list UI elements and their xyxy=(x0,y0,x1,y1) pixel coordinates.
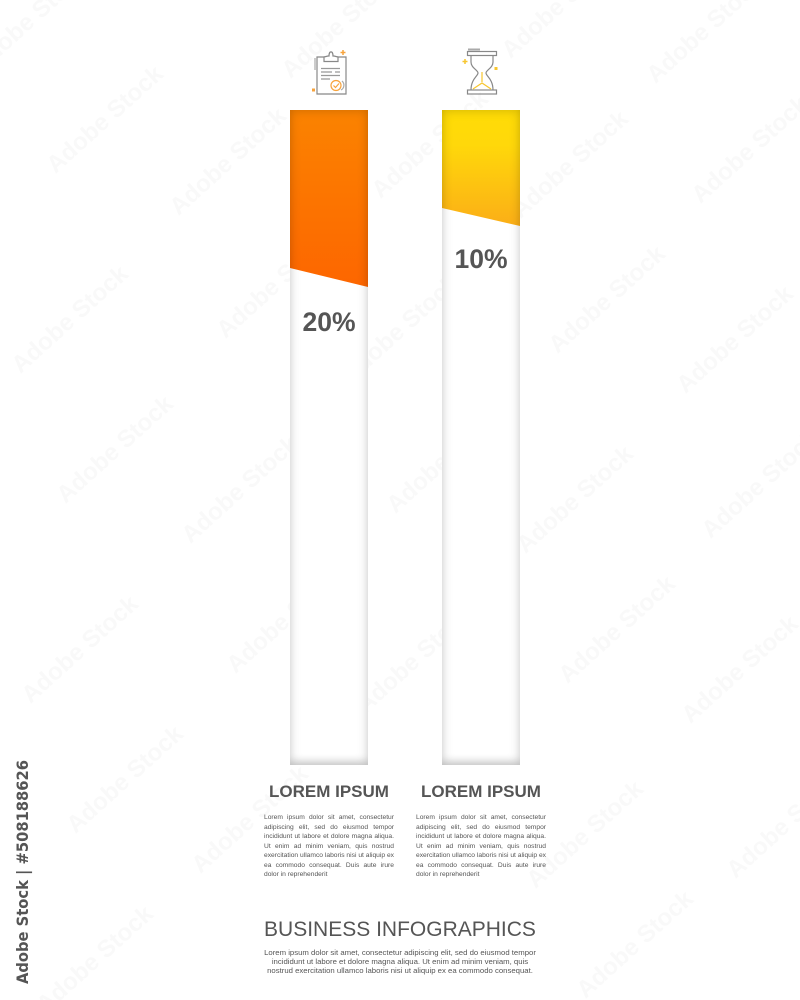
text block: left column: incididunt ut labore et dolore magna aliqua. xyxy=(264,833,394,840)
text: Adobe Stock xyxy=(511,440,639,559)
text block: right column: incididunt ut labore et dolore magna aliqua. xyxy=(416,833,546,840)
text: Adobe Stock xyxy=(41,60,169,179)
text block: right column: adipiscing elit, sed do eiusmod tempor xyxy=(416,824,546,831)
panel: yellow column xyxy=(442,110,520,765)
text block: left column: ea commodo consequat. Duis aute irure xyxy=(264,862,394,869)
text: Adobe Stock xyxy=(521,775,649,894)
text block: footer description: nostrud exercitation ullamco laboris nisi ut aliquip ex ea commodo consequat. xyxy=(267,966,533,975)
text block: right column: Lorem ipsum dolor sit amet, consectetur xyxy=(416,814,546,821)
text: Adobe Stock xyxy=(571,885,699,1000)
heading: left column: LOREM IPSUM xyxy=(269,782,389,800)
text block: right column xyxy=(416,814,546,878)
icon: clipboard with check badge xyxy=(312,50,347,95)
text block: right column: Ut enim ad minim veniam, quis nostrud xyxy=(416,843,546,850)
title: BUSINESS INFOGRAPHICS xyxy=(264,918,536,940)
text: Adobe Stock xyxy=(506,105,634,224)
text: Adobe Stock xyxy=(381,400,509,519)
percentage: 20%: 20% xyxy=(302,307,356,337)
text block: footer description: incididunt ut labore et dolore magna aliqua. Ut enim ad minim veniam, quis xyxy=(272,957,528,966)
text: Adobe Stock xyxy=(553,570,681,689)
text: Adobe Stock xyxy=(186,760,314,879)
text block: right column: ea commodo consequat. Duis aute irure xyxy=(416,862,546,869)
percentage: 10%: 10% xyxy=(454,244,508,274)
text: Adobe Stock xyxy=(176,430,304,549)
text block: left column: Lorem ipsum dolor sit amet, consectetur xyxy=(264,814,394,821)
text: Adobe Stock xyxy=(543,240,671,359)
text block: right column: exercitation ullamco laboris nisi ut aliquip ex xyxy=(416,852,546,859)
text: Adobe Stock xyxy=(16,590,144,709)
text block: left column xyxy=(264,814,394,878)
orange fill xyxy=(290,110,368,287)
text block: left column: Ut enim ad minim veniam, quis nostrud xyxy=(264,843,394,850)
text: Adobe Stock xyxy=(336,270,464,389)
icon: hourglass xyxy=(462,48,498,95)
text: Adobe Stock xyxy=(164,102,292,221)
text: Adobe Stock xyxy=(6,260,134,379)
yellow fill xyxy=(442,110,520,226)
text block: footer description xyxy=(264,948,536,975)
text: Adobe Stock xyxy=(221,560,349,679)
text block: left column: exercitation ullamco laboris nisi ut aliquip ex xyxy=(264,852,394,859)
text: Adobe Stock xyxy=(51,390,179,509)
text: Adobe Stock xyxy=(61,720,189,839)
text: Adobe Stock xyxy=(671,280,799,399)
text block: left column: dolor in reprehenderit xyxy=(264,871,327,878)
text: Adobe Stock xyxy=(351,600,479,719)
heading: right column: LOREM IPSUM xyxy=(421,782,541,800)
text: Adobe Stock xyxy=(211,225,339,344)
text: Adobe Stock xyxy=(676,610,800,729)
panel: orange column xyxy=(290,110,368,765)
text block: left column: adipiscing elit, sed do eiusmod tempor xyxy=(264,824,394,831)
text block: right column: dolor in reprehenderit xyxy=(416,871,479,878)
text block: footer description: Lorem ipsum dolor sit amet, consectetur adipiscing elit, sed do eiusmod tempor xyxy=(264,948,536,956)
text: Adobe Stock xyxy=(366,85,494,204)
